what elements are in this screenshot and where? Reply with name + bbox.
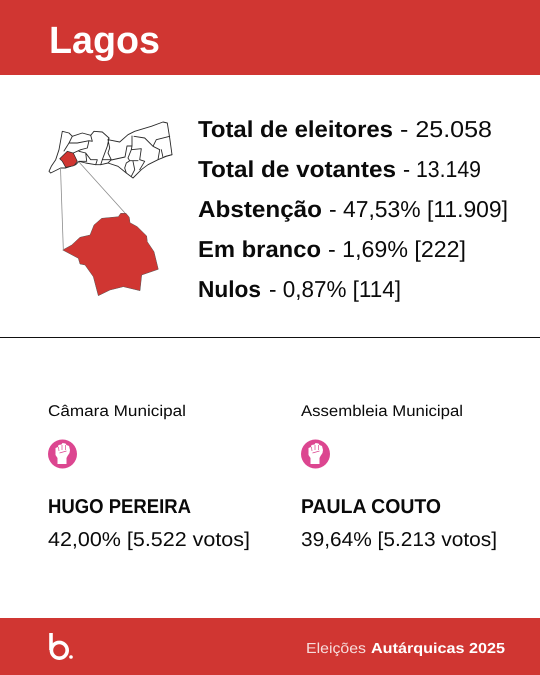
stat: em branco: - 1,69% [222]: [328, 236, 466, 262]
icon: fist party badge: [301, 440, 330, 468]
icon: fist party badge: [48, 440, 77, 468]
candidate result: 39,64% [5.213 votos]: [301, 529, 497, 551]
panel: câmara municipal: [48, 403, 250, 551]
footer text: Eleições: [306, 641, 366, 657]
footer band: [0, 618, 540, 675]
stat: abstenção: - 47,53% [11.909]: [329, 196, 508, 222]
stat: abstenção: Abstenção: [198, 196, 322, 222]
header band: [0, 0, 540, 75]
stat: abstenção: [198, 196, 508, 222]
candidate name: HUGO PEREIRA: [48, 496, 191, 518]
map: Lagos municipality small: [60, 151, 77, 167]
footer text: [306, 641, 505, 657]
stat: nulos: [198, 276, 401, 302]
stat: total de votantes: [198, 156, 481, 182]
label: assembleia municipal: Assembleia Municipal: [301, 403, 463, 420]
map of Algarve with Lagos highlighted: [49, 122, 172, 296]
candidate result: 42,00% [5.522 votos]: [48, 529, 250, 551]
stat: nulos: - 0,87% [114]: [269, 276, 401, 302]
label: câmara municipal: Câmara Municipal: [48, 403, 186, 420]
stat: em branco: [198, 236, 466, 262]
icon: logo: [51, 633, 73, 659]
stat: nulos: Nulos: [198, 276, 261, 302]
stat: total de votantes: - 13.149: [403, 156, 481, 182]
stat: em branco: Em branco: [198, 236, 321, 262]
map: zoom connector lines: [60, 162, 125, 249]
stat: total de eleitores: [198, 116, 492, 142]
candidate name: PAULA COUTO: [301, 496, 441, 518]
panel: assembleia municipal: [301, 403, 497, 551]
stat: total de votantes: Total de votantes: [198, 156, 396, 182]
map: Lagos municipality enlarged: [63, 213, 158, 296]
stat: total de eleitores: Total de eleitores: [198, 116, 393, 142]
footer text: Autárquicas 2025: [371, 641, 505, 657]
map: region outline and municipal borders: [49, 122, 172, 178]
stats block: [198, 116, 508, 302]
stat: total de eleitores: - 25.058: [400, 116, 492, 142]
title: Lagos: [49, 20, 160, 62]
